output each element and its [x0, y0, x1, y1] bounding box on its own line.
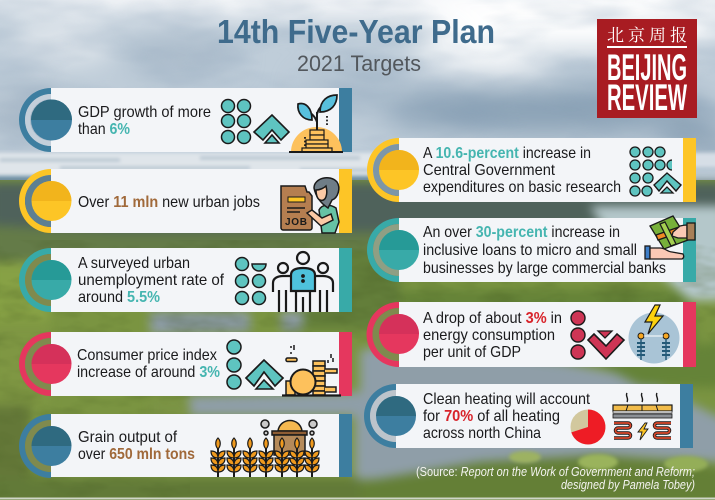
icon: electricity pylons — [628, 305, 680, 364]
text: energy consumption: energy consumption — [423, 327, 555, 344]
text: energy consumption: A drop of about 3% in — [423, 310, 562, 327]
text: consumer price index: increase of around 3% — [77, 364, 220, 381]
text: clean heating: across north China — [423, 425, 541, 442]
text: clean heating: Clean heating will account — [423, 391, 590, 408]
panel: energy consumption — [366, 302, 696, 367]
panel: basic research — [367, 138, 696, 202]
title: 14th Five-Year Plan — [217, 14, 495, 51]
logo: Beijing Review — [597, 19, 697, 118]
icon: dots and chevron — [227, 340, 283, 389]
icon: dots and chevron — [630, 147, 681, 196]
text: consumer price index: Consumer price index — [77, 347, 217, 364]
panel: GDP growth — [19, 88, 352, 152]
icon: job seeker with folder: JOB — [285, 217, 307, 228]
text: inclusive loans: An over 30-percent increase in — [423, 224, 620, 241]
text: unemployment rate: unemployment rate of — [78, 272, 225, 289]
text: clean heating — [423, 391, 590, 442]
text: unemployment rate: around 5.5% — [78, 289, 160, 306]
text: clean heating: for 70% of all heating — [423, 408, 560, 425]
text: inclusive loans — [423, 224, 666, 277]
panel: urban jobs — [19, 169, 352, 233]
icon: wheat row — [211, 438, 319, 477]
icon: hands passing money — [645, 216, 695, 259]
text: basic research: Central Government — [423, 162, 556, 179]
text: basic research: expenditures on basic research — [423, 179, 621, 196]
text: unemployment rate: A surveyed urban — [78, 255, 190, 272]
text: inclusive loans: businesses by large commercial banks — [423, 260, 666, 277]
panel: clean heating — [364, 384, 693, 448]
text: energy consumption: per unit of GDP — [423, 344, 521, 361]
text: urban jobs: Over 11 mln new urban jobs — [78, 194, 260, 211]
text: unemployment rate — [78, 255, 225, 306]
panel: consumer price index — [19, 332, 352, 396]
text: grain output: Grain output of — [78, 429, 178, 446]
text: grain output — [78, 429, 195, 463]
text: GDP growth — [78, 104, 211, 138]
text: GDP growth: GDP growth of more — [78, 104, 211, 121]
icon: floor heating — [613, 393, 672, 440]
icon: job seeker with folder — [281, 178, 339, 233]
panel: unemployment rate — [19, 248, 352, 312]
source note — [416, 464, 695, 492]
text: inclusive loans: inclusive loans to micro and small — [423, 242, 637, 259]
icon: dots and growth chevron — [222, 100, 289, 144]
panel: grain output — [19, 414, 352, 478]
icon: dots and down chevron — [571, 311, 624, 359]
text: basic research: A 10.6-percent increase in — [423, 145, 591, 162]
text: grain output: over 650 mln tons — [78, 446, 195, 463]
edge highlight — [0, 498, 715, 500]
subtitle: 2021 Targets — [297, 51, 421, 76]
icon: silo — [261, 420, 317, 455]
icon: coins — [282, 345, 341, 396]
text: GDP growth: than 6% — [78, 121, 130, 138]
chart: 70 percent pie — [570, 410, 606, 444]
text: consumer price index — [77, 347, 220, 381]
logo: Beijing Review: 北京周报 — [607, 21, 687, 46]
text: energy consumption — [423, 310, 562, 361]
icon: dots — [236, 258, 266, 304]
icon: plant on coins — [289, 95, 343, 152]
panel: inclusive loans — [367, 216, 696, 282]
text: basic research — [423, 145, 621, 196]
icon: three workers — [273, 252, 333, 312]
